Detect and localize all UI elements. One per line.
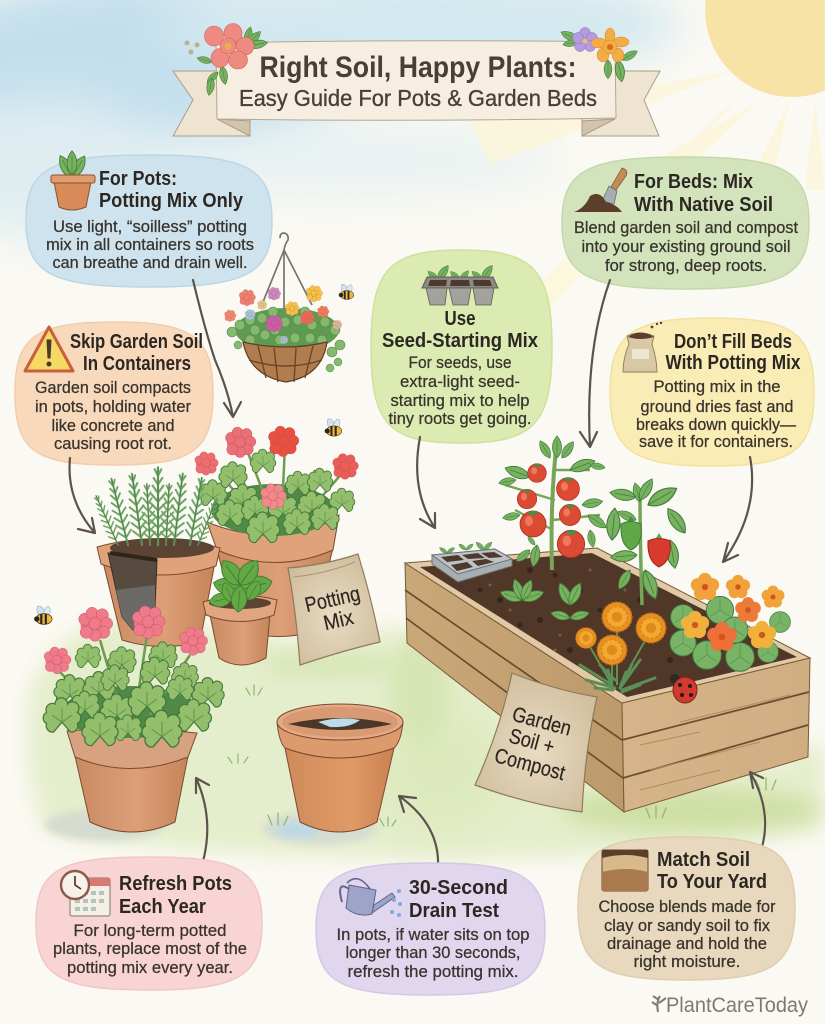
title banner <box>173 24 660 136</box>
potting mix bag: Potting <box>303 582 362 617</box>
title text: Right Soil, Happy Plants: <box>260 51 576 84</box>
arrow: match soil to bed <box>750 772 765 847</box>
icon: clock and calendar <box>61 871 110 916</box>
trailing foliage <box>227 307 345 372</box>
body text: Blend garden soil and compost <box>574 219 798 237</box>
body text: causing root rot. <box>54 435 172 453</box>
body text: Garden soil compacts <box>35 379 191 397</box>
body text: ground dries fast and <box>640 398 794 416</box>
heading: Refresh Pots <box>119 873 232 895</box>
body text: breaks down quickly— <box>636 416 796 434</box>
panel: match soil <box>578 837 795 980</box>
panel: for pots: Potting Mix Only <box>99 190 244 212</box>
tomato plant <box>498 436 609 570</box>
raised garden bed <box>405 436 810 812</box>
left flower decoration <box>184 24 268 96</box>
heading: Match Soil <box>657 849 750 871</box>
body text <box>636 378 796 451</box>
icon: watering can <box>340 879 402 917</box>
panel: drain test <box>316 863 545 995</box>
arrow: seed mix to tray <box>417 437 435 528</box>
body text: potting mix every year. <box>67 959 233 977</box>
body text: right moisture. <box>634 953 740 971</box>
body text: Choose blends made for <box>598 898 776 916</box>
heading: For Beds: Mix <box>634 171 753 193</box>
right face <box>622 658 810 812</box>
garden soil compost bag: Compost <box>492 744 568 785</box>
hanging basket <box>224 233 345 382</box>
icon: bee top <box>339 283 354 300</box>
body text: extra-light seed- <box>400 373 520 391</box>
left face <box>405 563 624 812</box>
body text: in pots, holding water <box>35 398 191 416</box>
body text: Use light, “soilless” potting <box>53 218 247 236</box>
heading: Use <box>444 308 476 330</box>
icon: soil bag <box>623 322 662 372</box>
grass tufts <box>228 685 776 826</box>
potting mix bag <box>288 554 380 665</box>
panel: refresh pots <box>36 857 262 990</box>
title banner: Easy Guide For Pots & Garden Beds <box>239 85 597 111</box>
sun <box>705 0 825 97</box>
nasturtiums <box>670 573 790 671</box>
watermark: PlantCareToday <box>666 994 808 1017</box>
body text: Potting mix in the <box>654 378 780 396</box>
ribbon tails <box>173 71 660 136</box>
sky wash <box>0 0 680 240</box>
seedling tray <box>432 541 512 582</box>
arrow: beds to bed <box>580 280 610 447</box>
icon: bee middle <box>325 417 342 436</box>
panel: for beds: With Native Soil <box>634 194 773 216</box>
heading: Skip Garden Soil <box>70 331 203 353</box>
pink geranium in pot <box>43 606 224 841</box>
big geranium in pot <box>195 426 358 637</box>
arrow: for pots to geranium <box>193 280 241 417</box>
heading: For Pots: <box>99 168 177 190</box>
basket flowers <box>224 285 342 344</box>
arrow: skip soil to pot <box>70 458 95 533</box>
empty pot drain test <box>262 704 403 845</box>
body text: For seeds, use <box>408 354 512 372</box>
arrow: refresh to pot <box>196 778 209 865</box>
garden soil compost bag: Garden <box>510 703 574 741</box>
panel: match soil: To Your Yard <box>657 871 767 893</box>
garden soil compost bag: Soil + <box>506 725 557 759</box>
grass wash <box>27 620 825 859</box>
panel: drain test: Drain Test <box>409 900 499 922</box>
body text <box>336 926 530 981</box>
pepper plant <box>605 477 690 605</box>
icon: seedling tray <box>422 264 498 305</box>
bed rim <box>405 548 810 703</box>
body text: refresh the potting mix. <box>348 963 518 981</box>
body text: can breathe and drain well. <box>52 254 248 272</box>
icon: soil layers <box>602 850 648 891</box>
body text <box>388 354 532 428</box>
panel: seed-starting mix <box>371 250 552 443</box>
body text <box>35 379 191 453</box>
icon: warning triangle <box>25 327 73 371</box>
garden soil compost bag <box>475 673 597 812</box>
body text: In pots, if water sits on top <box>336 926 530 944</box>
panel: skip garden soil <box>15 322 213 465</box>
sun rays <box>470 70 825 320</box>
panel: for pots <box>26 151 272 287</box>
icon: trowel and soil <box>574 168 627 212</box>
heading: 30-Second <box>409 877 508 899</box>
basket <box>243 342 327 382</box>
body text: mix in all containers so roots <box>46 236 254 254</box>
marigolds <box>576 602 666 692</box>
panel: seed-starting mix: Seed-Starting Mix <box>382 330 538 352</box>
icon: bee left <box>34 605 52 624</box>
body text <box>53 922 247 977</box>
body text <box>574 219 798 275</box>
body text: save it for containers. <box>639 433 793 451</box>
body text: tiny roots get going. <box>388 410 532 428</box>
icon: potted sprout <box>51 151 95 210</box>
body text: into your existing ground soil <box>582 238 790 256</box>
soil <box>420 553 797 697</box>
small seedlings <box>499 578 590 622</box>
panel: for beds <box>562 157 809 289</box>
panel: refresh pots: Each Year <box>119 896 206 918</box>
body text: For long-term potted <box>74 922 226 940</box>
icon: ladybug <box>670 674 697 703</box>
body text: for strong, deep roots. <box>605 257 767 275</box>
body text: plants, replace most of the <box>53 940 247 958</box>
body text: starting mix to help <box>390 392 530 410</box>
panel: skip garden soil: In Containers <box>83 353 191 375</box>
body text <box>598 898 776 971</box>
arrow: potting mix warning to bed <box>723 457 752 562</box>
ribbon front <box>216 41 616 120</box>
panel: don't fill beds: With Potting Mix <box>666 352 800 374</box>
body text: longer than 30 seconds, <box>346 944 520 962</box>
water puddle <box>262 811 378 845</box>
arrow: drain test to pot <box>399 796 438 867</box>
rosemary <box>150 467 166 545</box>
panel: don't fill beds <box>610 318 814 466</box>
rosemary cutaway pot <box>91 467 221 647</box>
body text: drainage and hold the <box>607 935 767 953</box>
potting mix bag: Mix <box>321 606 356 635</box>
body text <box>46 218 254 272</box>
body text: like concrete and <box>52 417 174 435</box>
basil pot <box>203 556 277 665</box>
body text: clay or sandy soil to fix <box>604 917 771 935</box>
heading: Don’t Fill Beds <box>674 331 792 353</box>
right flower decoration <box>559 28 639 82</box>
soil cross-section <box>108 553 157 630</box>
